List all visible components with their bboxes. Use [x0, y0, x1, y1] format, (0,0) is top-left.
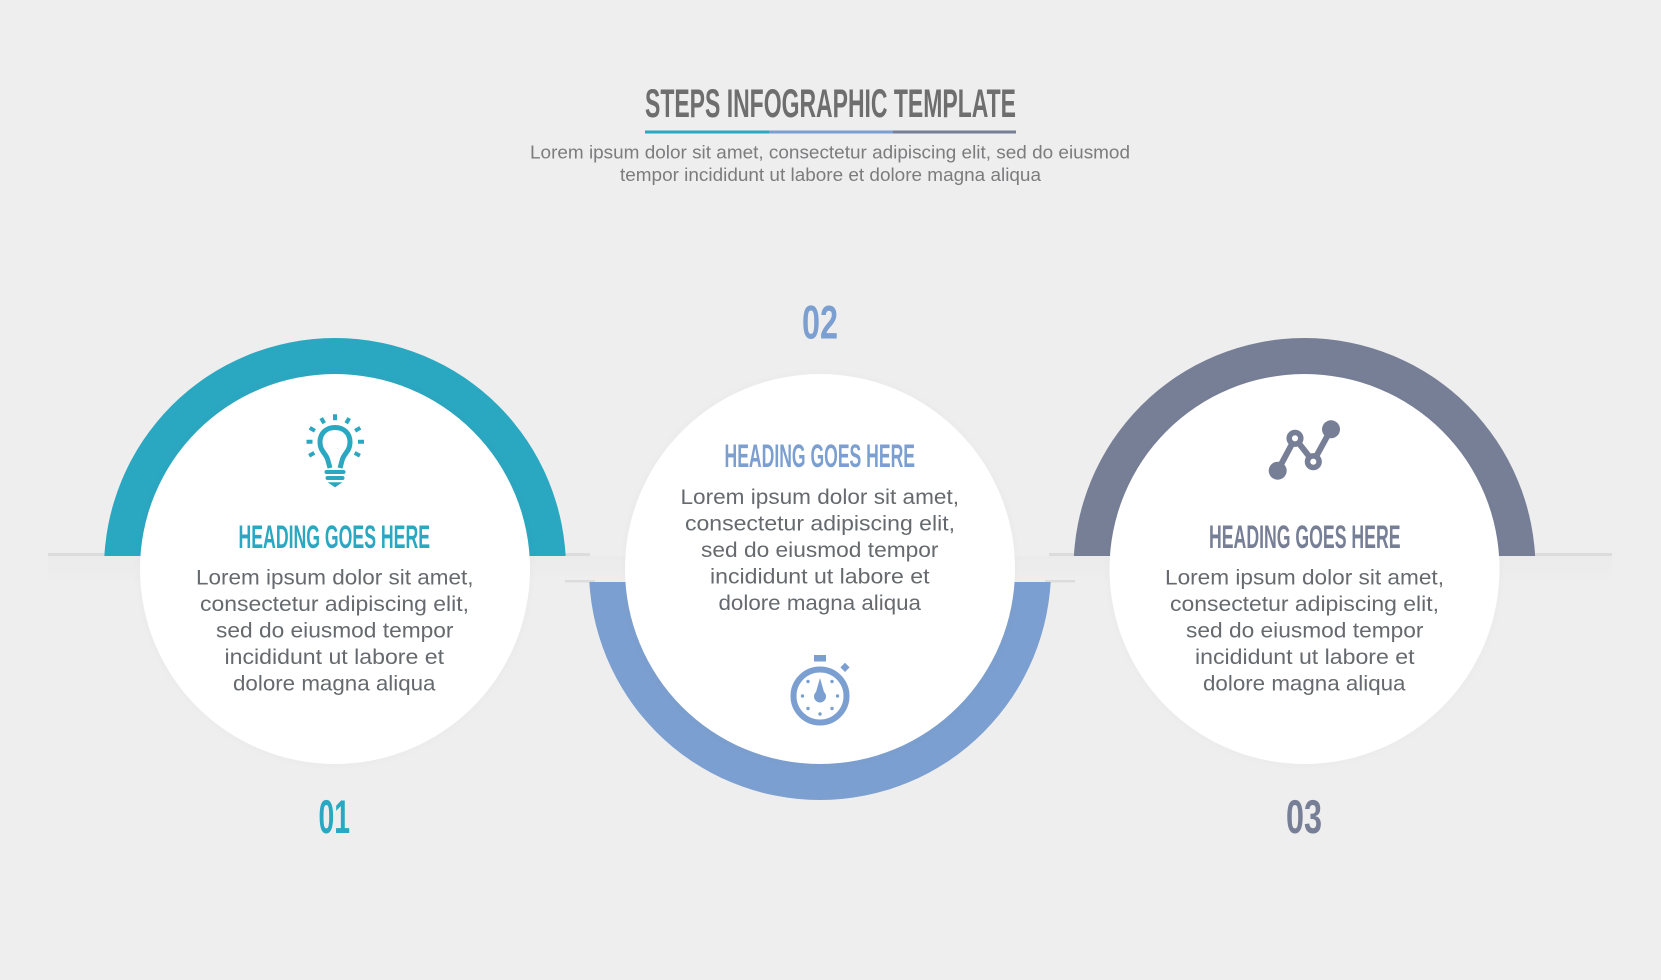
step 3 body text: sed do eiusmod tempor [1186, 620, 1424, 642]
step 1 arc [104, 338, 566, 556]
step 3 body text: consectetur adipiscing elit, [1170, 593, 1439, 616]
step 2 white circle [625, 374, 1015, 764]
step 2 body text: Lorem ipsum dolor sit amet, [680, 486, 959, 509]
step 3 heading: HEADING GOES HERE [1209, 519, 1400, 555]
step 1 body text: incididunt ut labore et [224, 646, 444, 669]
step 1 body text [196, 566, 474, 696]
step 2 body text [680, 486, 959, 615]
step 1 body text: consectetur adipiscing elit, [200, 593, 469, 616]
step 1 white circle [140, 374, 530, 764]
step 1 heading: HEADING GOES HERE [238, 519, 430, 555]
step 2 body text: sed do eiusmod tempor [701, 539, 938, 562]
panel: step 1 [104, 338, 566, 843]
panel: step 2 [589, 296, 1051, 800]
subtitle: tempor incididunt ut labore et dolore magna aliqua [620, 165, 1042, 185]
subtitle: Lorem ipsum dolor sit amet, consectetur adipiscing elit, sed do eiusmod [530, 142, 1130, 162]
step 3 arc [1074, 338, 1536, 556]
title: STEPS INFOGRAPHIC TEMPLATE [645, 82, 1016, 126]
step 3 number: 03 [1286, 790, 1322, 843]
step 3 white circle [1110, 374, 1500, 764]
step 3 body text: dolore magna aliqua [1203, 672, 1406, 696]
connector lines and shadows [48, 553, 1612, 586]
step 2 arc [589, 582, 1051, 800]
step 3 body text [1165, 566, 1444, 696]
subtitle [530, 142, 1130, 185]
icon: stopwatch [794, 655, 850, 722]
step 1 body text: sed do eiusmod tempor [216, 620, 454, 642]
step 1 number: 01 [318, 790, 350, 843]
step 2 body text: consectetur adipiscing elit, [685, 512, 955, 536]
step 3 body text: incididunt ut labore et [1195, 646, 1415, 669]
step 3 body text: Lorem ipsum dolor sit amet, [1165, 566, 1444, 590]
step 1 body text: Lorem ipsum dolor sit amet, [196, 566, 474, 590]
step 2 body text: incididunt ut labore et [710, 566, 930, 588]
icon: light bulb [306, 414, 364, 486]
step 2 heading: HEADING GOES HERE [724, 438, 915, 474]
step 2 number: 02 [802, 296, 838, 348]
step 2 body text: dolore magna aliqua [718, 592, 921, 615]
panel: step 3 [1074, 338, 1536, 843]
title underline [645, 130, 1016, 134]
step 1 body text: dolore magna aliqua [233, 672, 436, 696]
icon: line graph [1269, 420, 1340, 480]
